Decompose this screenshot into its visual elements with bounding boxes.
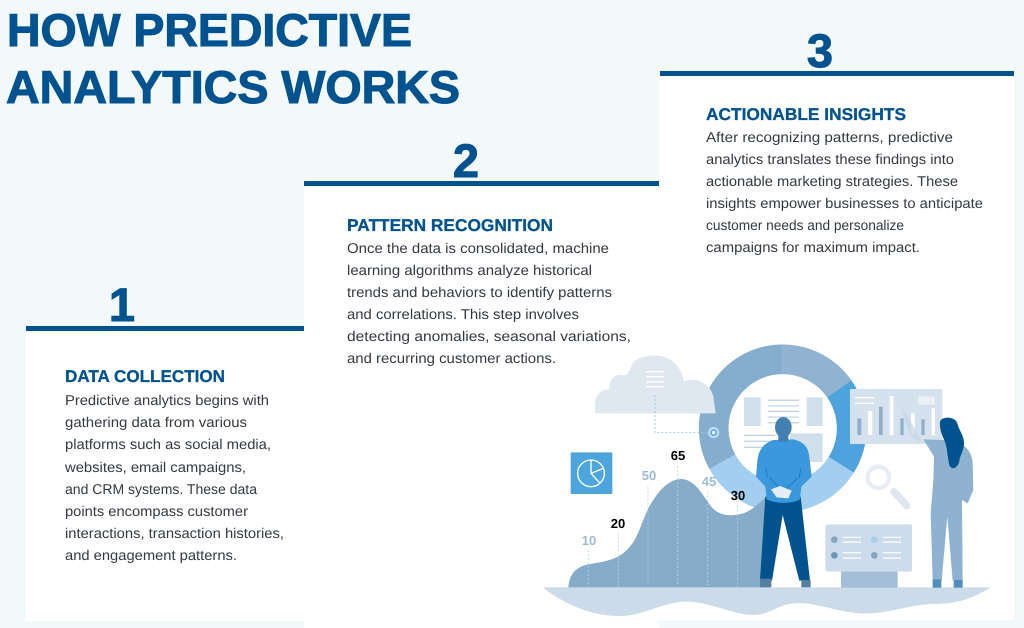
- text block: data collection: interactions, transaction histories,: [65, 526, 284, 542]
- step number 3: 3: [807, 24, 833, 77]
- text block: actionable insights: customer needs and personalize: [706, 218, 904, 234]
- text block: actionable insights: campaigns for maximum impact.: [706, 240, 920, 256]
- dashboard stand: [825, 524, 912, 588]
- text block: data collection: [64, 393, 284, 564]
- text block: actionable insights: After recognizing patterns, predictive: [706, 130, 953, 146]
- heading: pattern recognition: PATTERN RECOGNITION: [347, 216, 553, 235]
- step number 2: 2: [453, 134, 479, 187]
- cloud: [595, 355, 716, 413]
- text block: data collection: Predictive analytics begins with: [65, 393, 269, 409]
- man figure: [756, 417, 812, 587]
- woman figure: [923, 418, 973, 588]
- text block: actionable insights: analytics translates these findings into: [706, 152, 954, 168]
- donut chart: [714, 359, 852, 497]
- panel: step 3 actionable insights: [659, 24, 1014, 620]
- heading: data collection: DATA COLLECTION: [65, 367, 225, 386]
- text block: data collection: gathering data from various: [65, 415, 247, 431]
- text block: pattern recognition: [347, 241, 631, 367]
- text block: pattern recognition: and correlations. This step involves: [347, 307, 579, 323]
- text block: pattern recognition: detecting anomalies, seasonal variations,: [347, 329, 631, 345]
- magnifier icon: [868, 467, 907, 506]
- ground wave: [543, 587, 991, 616]
- dashboard inside donut: [744, 397, 823, 462]
- text block: data collection: and CRM systems. These data: [65, 482, 257, 498]
- chart value labels: [582, 448, 745, 548]
- text block: pattern recognition: and recurring customer actions.: [347, 351, 556, 367]
- text block: data collection: and engagement patterns.: [65, 548, 237, 564]
- chart value labels: 65: [671, 448, 685, 463]
- text block: pattern recognition: Once the data is consolidated, machine: [347, 241, 609, 257]
- area chart: [568, 466, 768, 587]
- step number 1: 1: [109, 278, 135, 331]
- chart value labels: 50: [642, 468, 656, 483]
- text block: data collection: platforms such as social media,: [65, 437, 271, 453]
- chart value labels: 20: [611, 516, 625, 531]
- text block: data collection: points encompass customer: [65, 504, 248, 520]
- text block: pattern recognition: learning algorithms analyze historical: [347, 263, 592, 279]
- illustration: analytics scene: [543, 355, 991, 616]
- text block: pattern recognition: trends and behaviors to identify patterns: [347, 285, 612, 301]
- text block: actionable insights: insights empower businesses to anticipate: [706, 196, 983, 212]
- panel: step 2 pattern recognition: [304, 134, 659, 628]
- chart value labels: 30: [731, 488, 745, 503]
- title: [6, 4, 460, 113]
- heading: actionable insights: ACTIONABLE INSIGHTS: [706, 105, 906, 124]
- icon: pie chart: [571, 452, 612, 494]
- presentation screen: [850, 389, 942, 444]
- title: HOW PREDICTIVE: [7, 4, 412, 56]
- chart value labels: 10: [582, 533, 596, 548]
- chart value labels: 45: [702, 474, 716, 489]
- dotted connector: [655, 395, 719, 438]
- panel: step 1 data collection: [26, 278, 304, 621]
- title: ANALYTICS WORKS: [6, 61, 460, 113]
- text block: data collection: websites, email campaigns,: [64, 460, 246, 476]
- text block: actionable insights: actionable marketing strategies. These: [706, 174, 958, 190]
- text block: actionable insights: [706, 130, 983, 256]
